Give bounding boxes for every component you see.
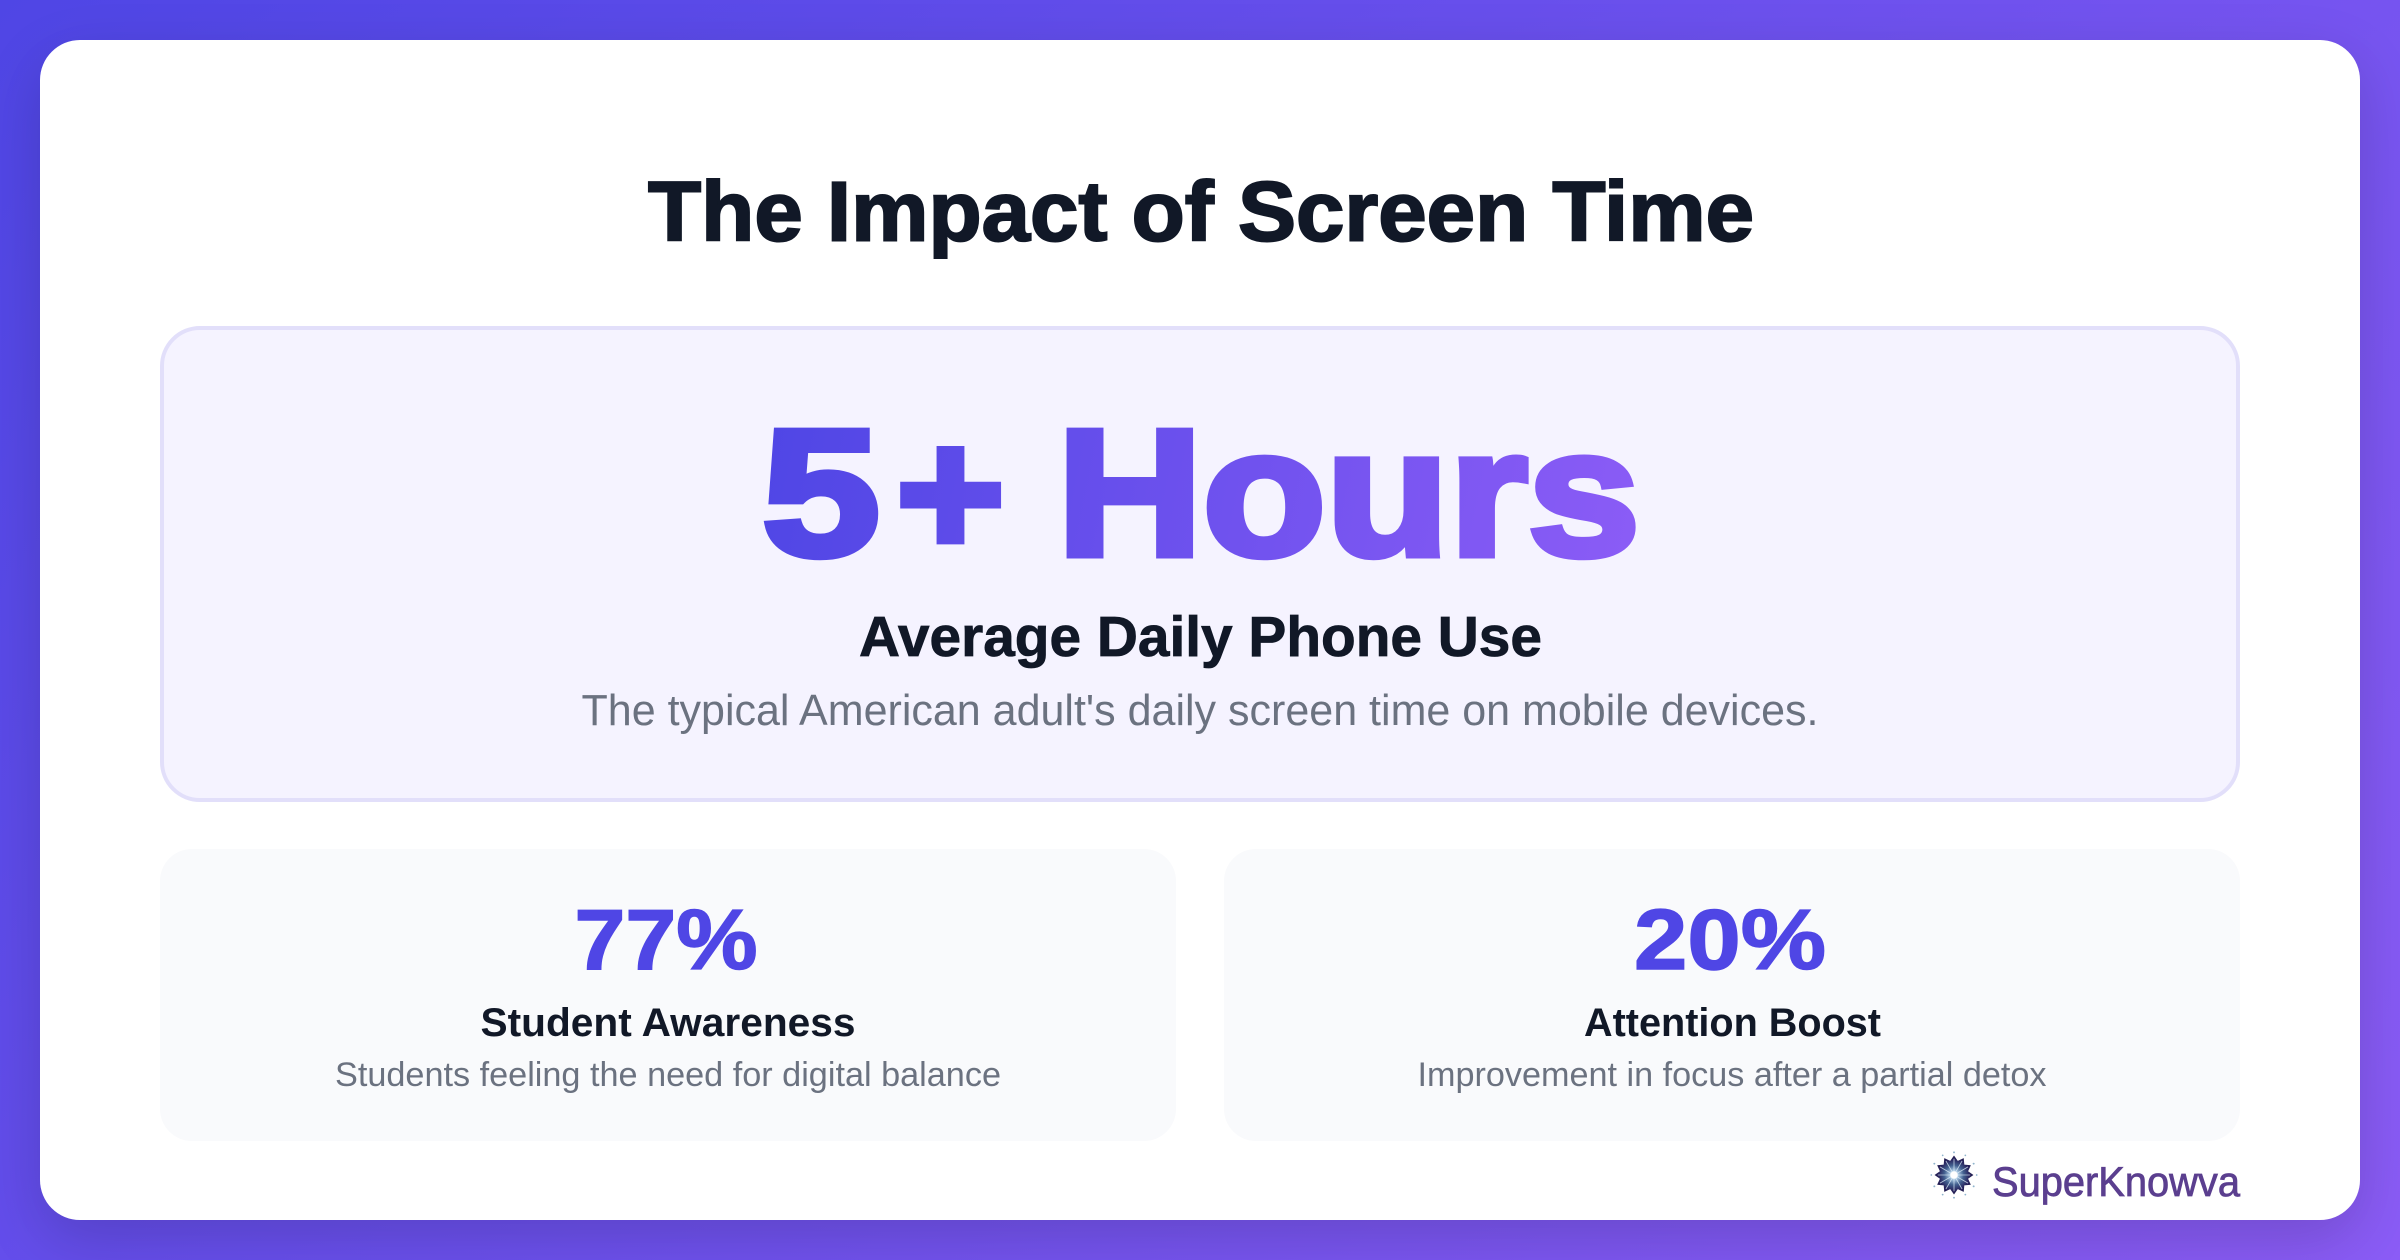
stat: 77%: 77% [574,893,758,988]
hero panel background [162,328,2238,800]
panel: hero stat [162,328,2238,800]
stat description: Students feeling the need for digital balance [335,1056,1001,1094]
logo: SuperKnowva [1930,1151,2241,1205]
big number: 5+ Hours [762,393,1640,594]
panel: student awareness [160,849,1176,1141]
big number: 5+ Hours: 5 [762,393,880,594]
stat description: Improvement in focus after a partial detox [1418,1056,2046,1094]
big number: 5+ Hours: Hours [1057,393,1640,594]
stat heading: Attention Boost [1584,1001,1881,1045]
panel: attention boost [1224,849,2240,1141]
hero heading: Average Daily Phone Use [859,605,1542,669]
icon: starburst [1930,1151,1978,1199]
stat: 20%: 20% [1634,893,1826,988]
stat heading: Student Awareness [480,1001,856,1045]
big number: 5+ Hours: + [896,393,1005,594]
card background [160,849,1176,1141]
hero description: The typical American adult's daily screen time on mobile devices. [582,686,1818,735]
card background [1224,849,2240,1141]
wordmark: SuperKnowva [1992,1158,2241,1205]
title: The Impact of Screen Time [648,164,1754,258]
